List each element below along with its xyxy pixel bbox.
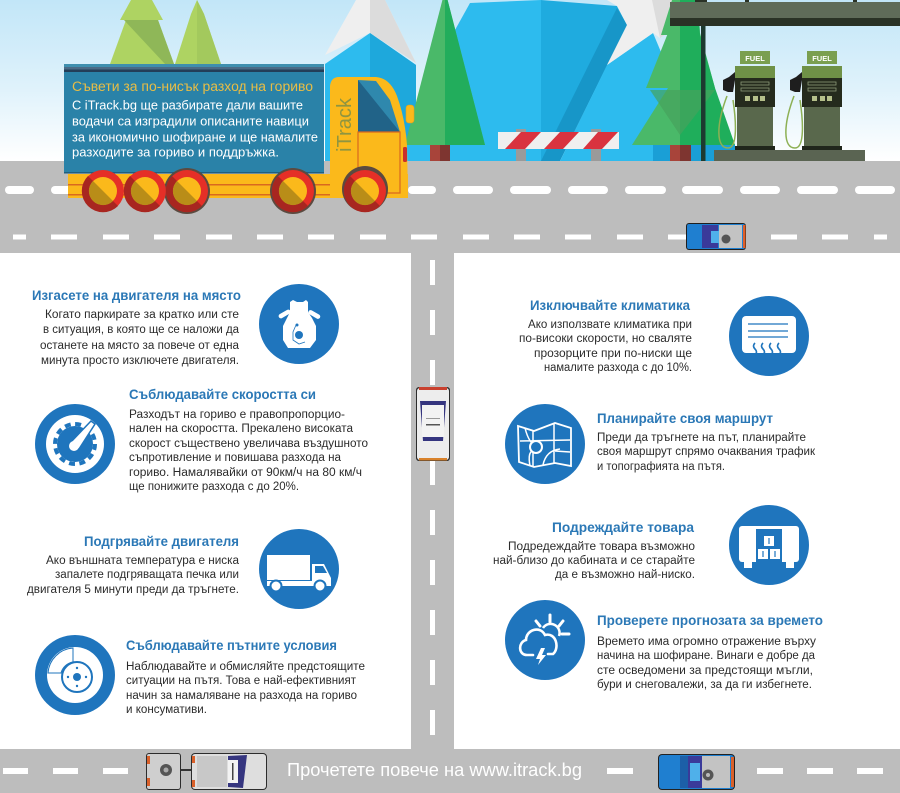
icon: map [505,404,585,484]
cab [191,753,267,790]
body text: да е възможно най-ниско. [555,569,695,581]
body text: в ситуация, в която ще се наложи да [43,324,240,336]
body text [40,309,240,367]
body text: намалите разхода с до 10%. [544,362,692,374]
body text: начин за намаляване на разхода на гориво [126,690,357,702]
bottom truck [146,753,267,790]
truck cab [330,77,414,197]
body text: Ако външната температура е ниска [46,555,240,567]
fuel pump 2: FUEL [812,54,832,63]
top blue car [686,223,746,250]
truck text: водачи са изградили описаните навици [72,114,309,128]
truck text [72,98,318,160]
body text: Когато паркирате за кратко или сте [45,309,239,321]
body text: минута просто изключете двигателя. [41,355,239,367]
truck heading: Съвети за по-нисък разход на гориво [72,79,313,94]
icon: cargo [729,505,809,585]
tip: engine off [32,284,339,367]
body text: прозорците при по-ниски ще [534,348,692,360]
trailer [146,753,181,790]
truck text: С iTrack.bg ще разбирате дали вашите [72,98,303,112]
body text: гориво. Намалявайки от 90км/ч на 80 км/ч [129,467,362,479]
heading: Съблюдавайте пътните условия [126,638,337,653]
body text: сте осведомени за предстоящи мъгли, [597,665,813,677]
barrier [498,129,619,161]
body text: Разходът на гориво е правопропорцио- [129,409,345,421]
truck container with text [64,64,324,174]
body text [126,661,365,716]
pole [701,26,706,161]
tip: road conditions [35,635,365,716]
body text: и консумативи. [126,704,207,716]
truck wheels [82,166,388,214]
truck [64,64,414,214]
tip: weather forecast [505,600,823,691]
bottom blue car [658,754,735,790]
heading: Съблюдавайте скоростта си [129,387,316,402]
truck cab: iTrack [334,97,356,152]
body text: Времето има огромно отражение върху [597,636,816,648]
body text: съпротивление и повишава разхода на [129,452,342,464]
sky background [0,0,900,161]
body text [493,541,695,581]
footer link text: Прочетете повече на www.itrack.bg [287,760,582,780]
body text: Преди да тръгнете на път, планирайте [597,432,806,444]
heading: Планирайте своя маршрут [597,411,773,426]
body text: скорост съществено увеличава въздушното [129,438,368,450]
canopy [670,0,900,26]
tip: plan route [505,404,816,484]
heading: Проверете прогнозата за времето [597,613,823,628]
body text: Подредеждайте товара възможно [508,541,695,553]
light green trees [110,0,221,64]
body text: останете на място за повече от една [40,340,240,352]
tip: arrange cargo [493,505,809,585]
body text: и топографията на пътя. [597,461,725,473]
body text [129,409,368,493]
icon: speedometer [35,404,115,484]
truck text: разходите за гориво и поддръжка. [72,146,279,160]
panel: right tips [454,253,900,749]
scenery: trees and mountains [110,0,735,161]
fuel pump 1: FUEL [745,54,765,63]
body text: ситуации на пътя. Това е най-ефективният [126,675,357,687]
right green tree [632,0,735,161]
icon: delivery truck [259,529,339,609]
tip: air conditioning [519,296,809,376]
body text: най-близо до кабината и се старайте [493,555,695,567]
heading: Изключвайте климатика [530,298,690,313]
body text [519,319,692,374]
heading: Подреждайте товара [552,520,694,535]
panel: left tips [0,253,411,749]
truck text: за икономично шофиране и ще намалите [72,130,318,144]
body text: двигателя 5 минути преди да тръгнете. [27,584,239,596]
mountains [325,0,735,161]
body text: бури и снеговалежи, за да ги избегнете. [597,679,812,691]
heading: Подгрявайте двигателя [84,534,239,549]
platform [714,150,865,161]
body text: ще понижите разхода с до 20%. [129,481,299,493]
gas station [670,0,900,161]
icon: air conditioner [729,296,809,376]
icon: brake disc [35,635,115,715]
icon: engine [259,284,339,364]
body text: Наблюдавайте и обмисляйте предстоящите [126,661,365,673]
body text: Ако използвате климатика при [528,319,692,331]
coupling [181,769,192,771]
body text [27,555,240,596]
tip: speed [35,387,368,493]
body text: своя маршрут спрямо очаквания трафик [597,446,816,458]
fuel pump 2 [786,51,842,150]
dark green tree [405,0,485,161]
body text: начина на шофиране. Винаги е добре да [597,650,816,662]
fuel pump 1 [719,51,775,150]
body text: запалете подгряващата печка или [55,569,239,581]
heading: Изгасете на двигателя на място [32,288,241,303]
body text [597,432,816,473]
body text [597,636,816,691]
truck chassis [68,174,408,198]
tip: warm engine [27,529,339,609]
vertical white car [416,387,450,461]
icon: weather [505,600,585,680]
body text: нален на скоростта. Прекалено високата [129,423,354,435]
body text: по-високи скорости, но сваляте [519,333,692,345]
road network [0,161,900,793]
